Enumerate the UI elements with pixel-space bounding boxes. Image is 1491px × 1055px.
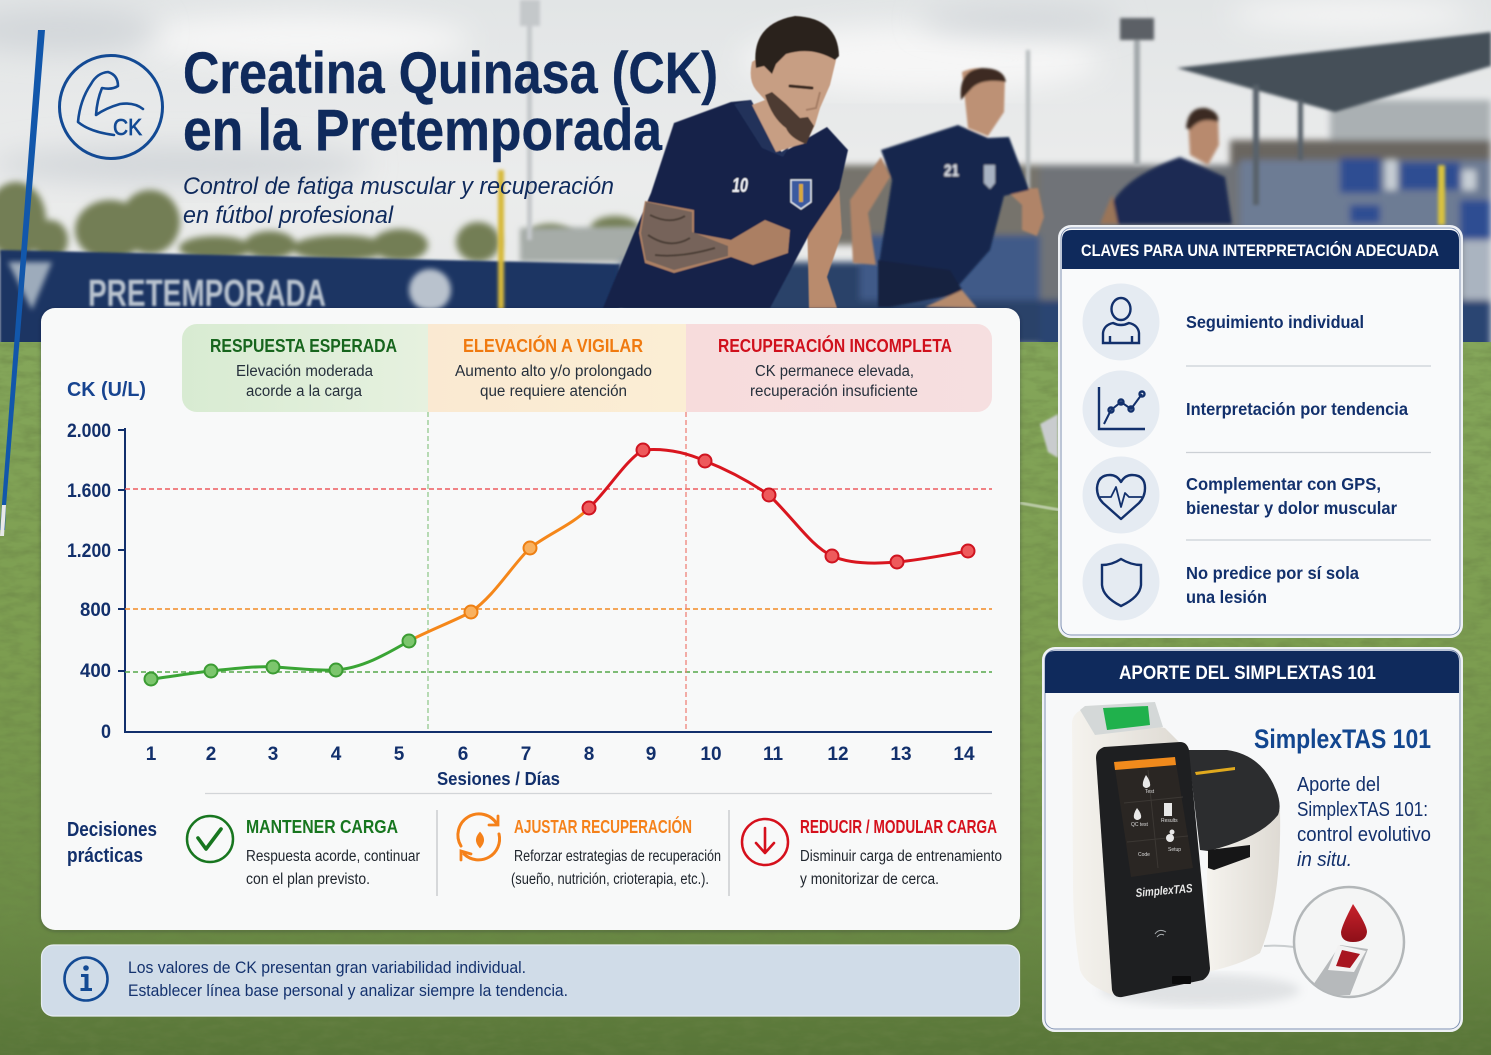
background stand: [620, 100, 1491, 350]
zone: elevación a vigilar: Aumento alto y/o prolongado: [455, 363, 652, 380]
line chart: 2.000: [67, 421, 111, 442]
line chart: 0: [101, 722, 111, 743]
line chart: 1: [146, 744, 157, 765]
device: SimplexTAS analyzer: QC test: [1131, 822, 1149, 828]
decision: mantener carga: con el plan previsto.: [246, 871, 370, 888]
player: second runner, number 21: 21: [944, 161, 959, 180]
title: en la Pretemporada: [183, 98, 663, 163]
description: in situ.: [1297, 849, 1352, 871]
line chart: 7: [521, 744, 531, 765]
rear dark lid: [1188, 750, 1280, 851]
device: SimplexTAS analyzer: SimplexTAS: [1135, 881, 1193, 900]
panel header: APORTE DEL SIMPLEXTAS 101: [1119, 663, 1376, 684]
line chart: 5: [394, 744, 405, 765]
decision: ajustar recuperación: [458, 814, 721, 888]
zone: respuesta esperada: [210, 336, 397, 400]
line chart: 1.200: [67, 541, 111, 562]
logo: muscle CK icon: [60, 56, 162, 158]
device: SimplexTAS analyzer: Test: [1145, 789, 1155, 795]
device: SimplexTAS analyzer: [1072, 702, 1300, 1006]
decision: mantener carga: Respuesta acorde, continuar: [246, 848, 420, 865]
line chart: 12: [827, 744, 849, 765]
inset: blood drop on test strip: [1264, 887, 1404, 997]
panel: claves: [1059, 226, 1462, 637]
zone: recuperación incompleta: recuperación insuficiente: [750, 383, 918, 400]
decision: reducir carga: REDUCIR / MODULAR CARGA: [800, 817, 997, 837]
white side body: [1072, 710, 1182, 995]
brand title: SimplexTAS 101: [1254, 724, 1431, 754]
decision: ajustar recuperación: (sueño, nutrición, crioterapia, etc.).: [511, 871, 709, 888]
zones band: [182, 324, 992, 412]
info note: Establecer línea base personal y analizar siempre la tendencia.: [128, 982, 568, 1000]
player: second runner, number 21: [850, 68, 1044, 308]
line chart: 6: [458, 744, 468, 765]
zone: recuperación incompleta: RECUPERACIÓN INCOMPLETA: [718, 335, 952, 356]
icon: down arrow: [742, 819, 788, 865]
device: SimplexTAS analyzer: Results: [1161, 818, 1178, 824]
decision: mantener carga: [187, 816, 420, 888]
decision: ajustar recuperación: Reforzar estrategias de recuperación: [514, 848, 721, 865]
logo: muscle CK icon: CK: [113, 114, 143, 140]
zone: elevación a vigilar: [455, 335, 652, 400]
item: seguimiento individual: Seguimiento individual: [1186, 312, 1364, 332]
line chart: 14: [953, 744, 975, 765]
description: SimplexTAS 101:: [1297, 799, 1428, 821]
panel header: CLAVES PARA UNA INTERPRETACIÓN ADECUADA: [1081, 241, 1439, 260]
item: interpretación por tendencia: Interpretación por tendencia: [1186, 399, 1408, 419]
decisions heading: Decisiones: [67, 819, 157, 841]
zone: respuesta esperada: acorde a la carga: [246, 383, 362, 400]
line chart: 3: [268, 744, 278, 765]
line chart: 11: [763, 744, 783, 765]
line chart: 9: [646, 744, 656, 765]
subtitle: Control de fatiga muscular y recuperación: [183, 173, 614, 200]
description: [1297, 774, 1431, 871]
zone: respuesta esperada: Elevación moderada: [236, 363, 373, 380]
description: Aporte del: [1297, 774, 1380, 796]
item: no predice: una lesión: [1186, 587, 1267, 607]
zone: elevación a vigilar: que requiere atención: [480, 383, 627, 400]
photo background: football stadium: PRETEMPORADA: [88, 273, 326, 315]
subtitle: [183, 173, 614, 229]
item: complementar: [1082, 456, 1397, 534]
line chart: CK (U/L): [67, 379, 146, 401]
line chart: 8: [584, 744, 594, 765]
info note: Los valores de CK presentan gran variabilidad individual.: [128, 959, 526, 977]
title: Creatina Quinasa (CK): [183, 41, 718, 106]
decision: reducir carga: Disminuir carga de entrenamiento: [800, 848, 1002, 865]
line chart: 800: [80, 600, 111, 621]
zone: respuesta esperada: RESPUESTA ESPERADA: [210, 336, 397, 356]
item: no predice: No predice por sí sola: [1186, 563, 1359, 583]
line chart: 1.600: [67, 481, 111, 502]
decisions heading: prácticas: [67, 845, 143, 867]
decision: mantener carga: MANTENER CARGA: [246, 817, 398, 837]
player: first runner, number 10: [603, 16, 848, 308]
info note: [42, 945, 1020, 1016]
item: seguimiento individual: [1082, 284, 1364, 360]
item: no predice: [1082, 544, 1359, 620]
device: SimplexTAS analyzer: Setup: [1168, 847, 1181, 853]
panel header: [1062, 230, 1459, 269]
panel header: [1045, 651, 1459, 693]
black front: [1096, 742, 1210, 997]
icon: recovery cycle: [458, 814, 500, 860]
icon: check: [187, 816, 233, 862]
line chart: 4: [331, 744, 342, 765]
zone: elevación a vigilar: ELEVACIÓN A VIGILAR: [463, 335, 643, 356]
icon: info: [64, 958, 108, 1000]
zone: recuperación incompleta: CK permanece elevada,: [755, 363, 914, 380]
device: SimplexTAS analyzer: Code: [1138, 852, 1150, 858]
decision: reducir carga: y monitorizar de cerca.: [800, 871, 939, 888]
line chart: Sesiones / Días: [437, 769, 560, 789]
line chart: [67, 379, 992, 789]
description: control evolutivo: [1297, 824, 1431, 846]
line chart: 13: [890, 744, 912, 765]
panel: SimplexTAS: [1043, 648, 1462, 1031]
panel: CK chart and decisions: [41, 308, 1020, 930]
line chart: 400: [80, 661, 111, 682]
rear white housing: [1207, 810, 1280, 972]
decision: reducir carga: [742, 817, 1002, 888]
item: complementar: Complementar con GPS,: [1186, 474, 1381, 494]
title: [183, 41, 718, 163]
player: third runner, blurred: [1100, 108, 1232, 224]
subtitle: en fútbol profesional: [183, 202, 394, 229]
decision: ajustar recuperación: AJUSTAR RECUPERACIÓN: [514, 816, 692, 837]
item: complementar: bienestar y dolor muscular: [1186, 498, 1397, 518]
decisions heading: [67, 819, 157, 867]
zone: recuperación incompleta: [718, 335, 952, 400]
line chart: 10: [700, 744, 722, 765]
printer cover: [1080, 702, 1163, 735]
item: interpretación por tendencia: [1082, 370, 1408, 448]
line chart: 2: [206, 744, 216, 765]
player: first runner, number 10: 10: [732, 175, 748, 197]
